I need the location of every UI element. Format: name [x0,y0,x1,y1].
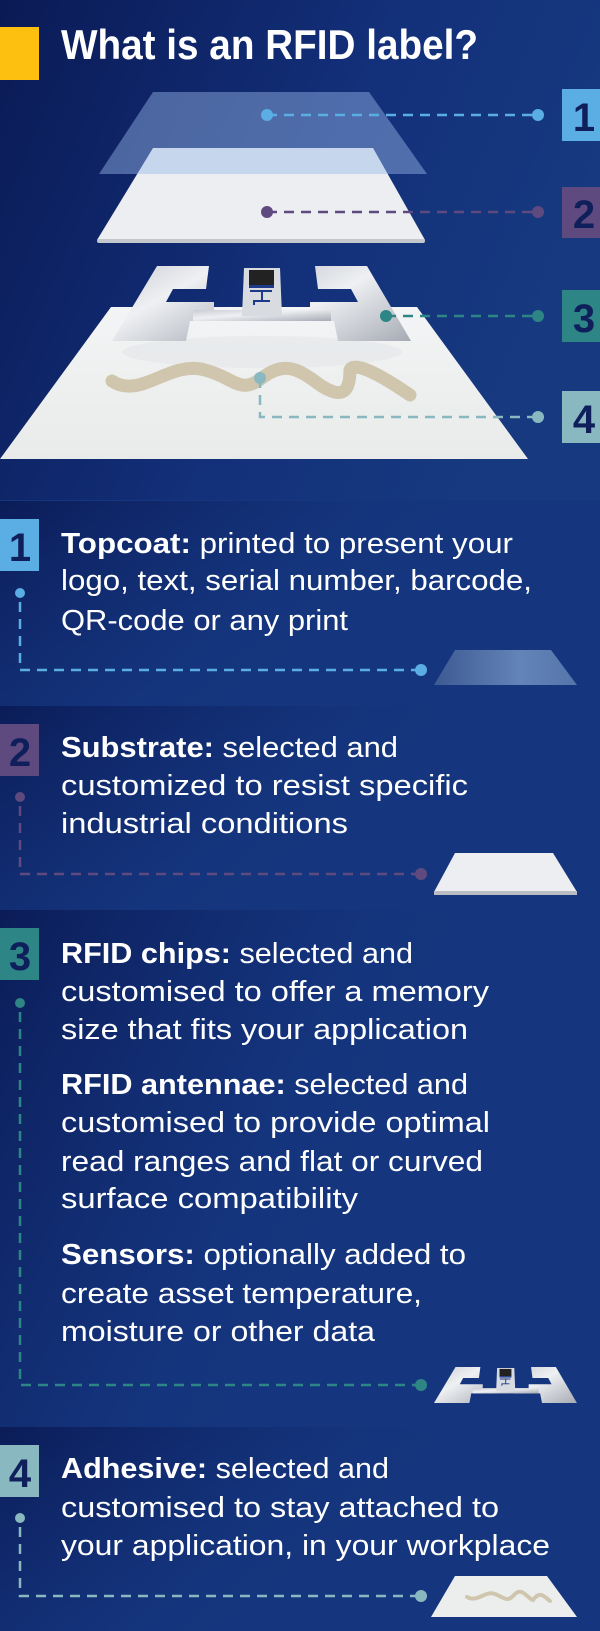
title [0,21,478,80]
text: topcoat: QR-code or any print [61,605,348,637]
callout 4: 4 [573,398,596,442]
layer 2: substrate [97,148,425,243]
text: RFID antennae: RFID antennae: selected and [61,1069,468,1101]
text: topcoat: logo, text, serial number, barcode, [61,565,532,597]
text: substrate: industrial conditions [61,808,348,840]
number badge 2: 2 [9,731,31,775]
icon: substrate layer [434,853,577,895]
connector 3 [15,998,427,1391]
connector 2 [15,792,427,880]
callout 2: 2 [573,193,595,237]
text: RFID chips: customised to offer a memory [61,976,490,1008]
panel: chips, antennae, sensors [0,928,577,1403]
text: RFID antennae: surface compatibility [61,1183,359,1215]
callout 2 [261,187,600,238]
number badge 1: 1 [9,526,31,570]
connector 1 [15,588,427,676]
number badge 2 [0,724,39,776]
title: What is an RFID label? [61,21,478,68]
text: substrate: Substrate: selected and [61,732,398,764]
text: RFID antennae [61,1069,490,1215]
number badge 4: 4 [9,1452,32,1496]
text: sensors: create asset temperature, [61,1278,422,1310]
text: topcoat: Topcoat: printed to present your [61,528,513,560]
text: sensors [61,1239,466,1348]
text: substrate [61,732,468,840]
text: RFID antennae: read ranges and flat or curved [61,1146,483,1178]
text: topcoat [61,528,532,637]
number badge 3: 3 [9,935,31,979]
callout 4 [254,372,600,443]
callout 1: 1 [573,96,595,140]
connector 4 [15,1513,427,1602]
callout 3 [380,290,600,342]
text: adhesive: your application, in your workplace [61,1530,550,1562]
text: RFID chips: size that fits your application [61,1014,468,1046]
text: sensors: Sensors: optionally added to [61,1239,466,1271]
panel: topcoat [0,519,577,685]
callout 1 [261,89,600,141]
number badge 4 [0,1445,39,1497]
text: adhesive: Adhesive: selected and [61,1453,389,1485]
layer 3: antenna and chip [112,266,411,341]
icon: antenna [434,1367,577,1403]
exploded diagram [0,92,528,459]
icon: adhesive layer [431,1576,577,1617]
layer 1: topcoat [99,92,427,174]
text: RFID antennae: customised to provide optimal [61,1107,490,1139]
text: RFID chips [61,938,490,1046]
panel: adhesive [0,1445,577,1617]
text: adhesive: customised to stay attached to [61,1492,499,1524]
text: sensors: moisture or other data [61,1316,376,1348]
text: RFID chips: RFID chips: selected and [61,938,413,970]
number badge 1 [0,519,39,571]
layer 4: base with adhesive [0,307,528,459]
icon: yellow square [0,27,39,80]
icon: topcoat layer [434,650,577,685]
text: substrate: customized to resist specific [61,770,468,802]
callout 3: 3 [573,297,595,341]
number badge 3 [0,928,39,980]
text: adhesive [61,1453,550,1562]
panel: substrate [0,724,577,895]
